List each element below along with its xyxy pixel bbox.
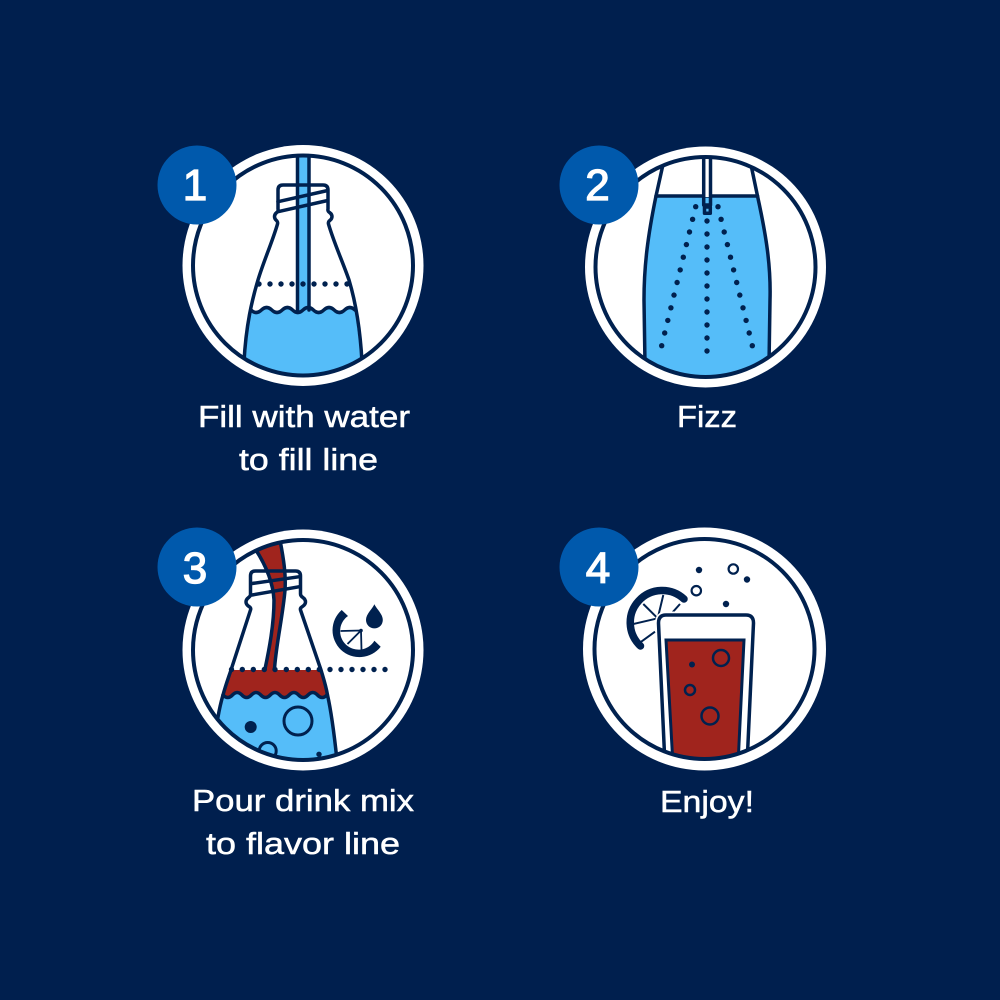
flavor line dots xyxy=(229,667,388,672)
icon: drop xyxy=(366,604,383,628)
panel: step 3 pour drink mix xyxy=(158,528,424,770)
panel: step 4 enjoy: 4 xyxy=(586,544,610,593)
caption: step 1: Fill with water xyxy=(198,399,410,434)
caption: step 2: Fizz xyxy=(677,399,737,434)
rising bubbles xyxy=(692,564,750,607)
fizz dots xyxy=(659,204,755,354)
caption: step 3: Pour drink mix xyxy=(192,783,415,818)
illustration: bottle with drink mix pour xyxy=(216,544,388,758)
panel: step 1 fill with water: 1 xyxy=(183,161,207,210)
bottle outline xyxy=(216,569,338,754)
panel: step 2 fizz xyxy=(560,146,826,390)
red pour stream xyxy=(259,544,284,670)
panel: step 4 enjoy xyxy=(560,528,826,770)
bubbles xyxy=(284,707,312,735)
icon: lime slice xyxy=(630,590,684,646)
panel: step 3 pour drink mix: 3 xyxy=(183,544,207,593)
panel: step 1 fill with water xyxy=(158,145,424,386)
caption: step 3: to flavor line xyxy=(206,826,400,861)
panel: step 2 fizz: 2 xyxy=(585,161,610,210)
glass xyxy=(655,612,675,633)
icon: lime wedge xyxy=(333,610,381,657)
illustration: glass with lime and bubbles xyxy=(630,564,754,765)
fill line dots xyxy=(256,281,350,287)
illustration: bottle with carbonation nozzle xyxy=(644,155,770,390)
caption: step 4: Enjoy! xyxy=(660,784,754,819)
illustration: bottle with straw and water xyxy=(242,150,364,380)
caption: step 1: to fill line xyxy=(239,442,378,477)
drink bubbles xyxy=(685,650,729,724)
